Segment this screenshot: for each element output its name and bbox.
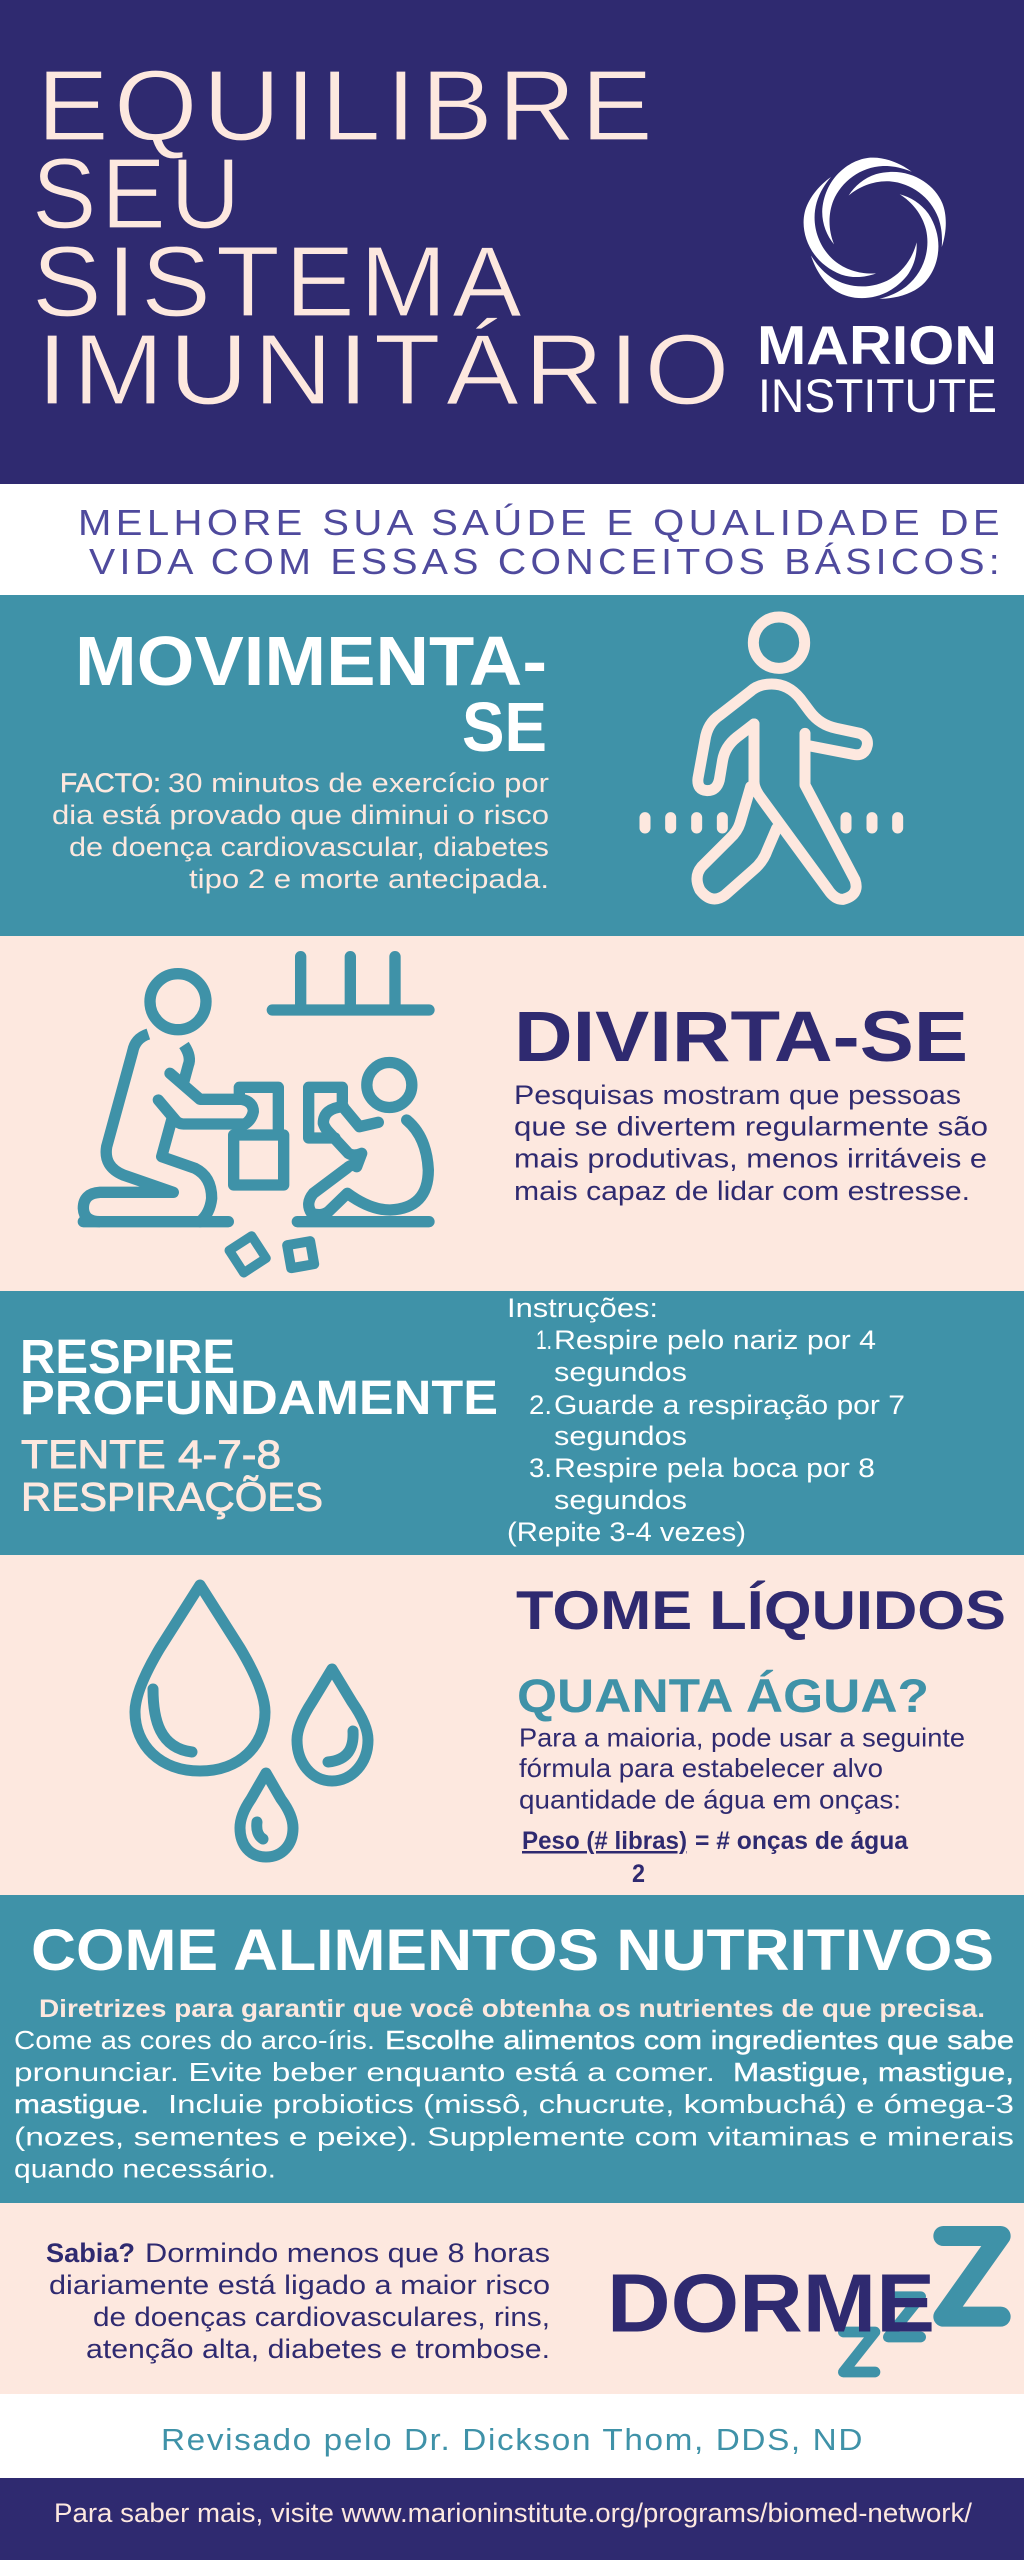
text: sleep fact bbox=[46, 2238, 550, 2364]
panel: divirta-se bbox=[0, 936, 1024, 1291]
text: breathing instructions: (Repite 3-4 vezes) bbox=[507, 1517, 746, 1547]
text: nutrition guidelines: Incluie probiotics (missô, chucrute, kombuchá) e ómega-3 bbox=[168, 2089, 1014, 2119]
text: movimenta-se fact: tipo 2 e morte antecipada. bbox=[189, 864, 549, 894]
text: breathing instructions: Guarde a respiração por 7 bbox=[554, 1390, 905, 1420]
text: sleep fact: Sabia? bbox=[46, 2238, 135, 2268]
title bbox=[32, 50, 735, 426]
text: breathing instructions bbox=[507, 1293, 905, 1547]
text: breathing instructions: segundos bbox=[554, 1357, 687, 1387]
text: breathing instructions: 3. bbox=[529, 1453, 552, 1483]
text: nutrition guidelines bbox=[14, 2025, 1014, 2184]
text: breathing instructions: Respire pelo nariz por 4 bbox=[554, 1325, 876, 1355]
panel: come alimentos nutritivos bbox=[0, 1895, 1024, 2203]
subtitle: MELHORE SUA SAÚDE E QUALIDADE DE bbox=[78, 502, 1004, 543]
text: nutrition guidelines: Mastigue, mastigue, bbox=[733, 2057, 1014, 2087]
text: water formula: 2 bbox=[632, 1860, 645, 1888]
text: breathing instructions: 1. bbox=[536, 1325, 552, 1355]
panel: dorme bbox=[0, 2203, 1024, 2394]
logo wordmark: MARION bbox=[757, 314, 997, 376]
text: nutrition guidelines: mastigue. bbox=[14, 2089, 149, 2119]
heading: tome líquidos: TOME LÍQUIDOS bbox=[516, 1579, 1006, 1641]
footer link text: Para saber mais, visite www.marioninstitute.org/programs/biomed-network/ bbox=[54, 2498, 973, 2528]
heading: come alimentos nutritivos: COME ALIMENTOS NUTRITIVOS bbox=[31, 1918, 994, 1983]
text: divirta-se research: que se divertem regularmente são bbox=[514, 1112, 988, 1142]
text: water formula: Peso (# libras) bbox=[522, 1827, 687, 1855]
text: nutrition guidelines: (nozes, sementes e peixe). Supplemente com vitaminas e minerais bbox=[14, 2122, 1014, 2152]
heading: respire profundamente: PROFUNDAMENTE bbox=[20, 1372, 498, 1425]
logo wordmark bbox=[757, 314, 997, 422]
heading: movimenta-se: SE bbox=[462, 688, 547, 766]
text: nutrition guidelines lead: Diretrizes para garantir que você obtenha os nutrientes de que precisa. bbox=[39, 1995, 985, 2023]
text: water formula: = # onças de água bbox=[695, 1827, 909, 1855]
title: IMUNITÁRIO bbox=[37, 314, 735, 426]
icon: Marion Institute swirl logo bbox=[790, 157, 960, 320]
subheading: 4-7-8 breaths: RESPIRAÇÕES bbox=[21, 1474, 323, 1520]
heading: movimenta-se bbox=[75, 622, 547, 766]
text: breathing instructions: 2. bbox=[529, 1390, 552, 1420]
text: movimenta-se fact: FACTO: bbox=[60, 768, 161, 798]
text: movimenta-se fact: dia está provado que diminui o risco bbox=[52, 800, 549, 830]
subheading: quanta água: QUANTA ÁGUA? bbox=[517, 1669, 929, 1722]
text: water formula intro: quantidade de água em onças: bbox=[519, 1784, 901, 1814]
text: water formula intro bbox=[519, 1722, 965, 1814]
text: nutrition guidelines: Come as cores do arco-íris. bbox=[14, 2025, 375, 2055]
subtitle: VIDA COM ESSAS CONCEITOS BÁSICOS: bbox=[89, 541, 1004, 582]
text: divirta-se research: mais capaz de lidar com estresse. bbox=[514, 1176, 970, 1206]
panel: header background bbox=[0, 0, 1024, 484]
text: breathing instructions: Instruções: bbox=[507, 1293, 658, 1323]
heading: movimenta-se: MOVIMENTA- bbox=[75, 622, 547, 700]
title: EQUILIBRE bbox=[37, 50, 658, 162]
panel: respire profundamente bbox=[0, 1291, 1024, 1555]
heading: respire profundamente: RESPIRE bbox=[20, 1331, 235, 1384]
heading: divirta-se: DIVIRTA-SE bbox=[514, 998, 968, 1077]
text: divirta-se research: mais produtivas, menos irritáveis e bbox=[514, 1144, 987, 1174]
text: water formula intro: Para a maioria, pode usar a seguinte bbox=[519, 1722, 965, 1752]
subheading: 4-7-8 breaths bbox=[21, 1433, 323, 1520]
subtitle bbox=[78, 502, 1004, 582]
text: breathing instructions: segundos bbox=[554, 1485, 687, 1515]
text: water formula bbox=[522, 1827, 909, 1888]
text: water formula intro: fórmula para estabelecer alvo bbox=[519, 1753, 883, 1783]
panel: footer bbox=[0, 2478, 1024, 2560]
text: movimenta-se fact: de doença cardiovascular, diabetes bbox=[69, 832, 549, 862]
heading: respire profundamente bbox=[20, 1331, 498, 1425]
text: breathing instructions: Respire pela boca por 8 bbox=[554, 1453, 875, 1483]
text: sleep fact: Dormindo menos que 8 horas bbox=[145, 2238, 550, 2268]
text: movimenta-se fact bbox=[52, 768, 549, 894]
title: SISTEMA bbox=[32, 226, 527, 338]
text: sleep fact: atenção alta, diabetes e trombose. bbox=[86, 2334, 550, 2364]
text: divirta-se research: Pesquisas mostram que pessoas bbox=[514, 1080, 961, 1110]
text: breathing instructions: segundos bbox=[554, 1421, 687, 1451]
text: nutrition guidelines: Escolhe alimentos com ingredientes que sabe bbox=[385, 2025, 1014, 2055]
text: nutrition guidelines: pronunciar. Evite beber enquanto está a comer. bbox=[14, 2057, 715, 2087]
text: movimenta-se fact: 30 minutos de exercício por bbox=[168, 768, 549, 798]
text: sleep fact: diariamente está ligado a maior risco bbox=[49, 2270, 550, 2300]
logo wordmark: INSTITUTE bbox=[758, 369, 997, 422]
heading: dorme: DORME bbox=[607, 2256, 935, 2350]
panel: movimenta-se bbox=[0, 595, 1024, 936]
title: SEU bbox=[32, 138, 245, 250]
icon: adult and child playing with blocks bbox=[83, 957, 429, 1273]
icon: water drops bbox=[135, 1585, 368, 1857]
subheading: 4-7-8 breaths: TENTE 4-7-8 bbox=[21, 1433, 281, 1477]
text: divirta-se research bbox=[514, 1080, 988, 1206]
reviewer credit: Revisado pelo Dr. Dickson Thom, DDS, ND bbox=[161, 2422, 864, 2457]
icon: sleeping z letters bbox=[843, 2236, 1001, 2372]
text: nutrition guidelines: quando necessário. bbox=[14, 2154, 276, 2184]
text: sleep fact: de doenças cardiovasculares, rins, bbox=[93, 2302, 550, 2332]
icon: walking person bbox=[645, 617, 898, 899]
panel: tome líquidos bbox=[0, 1555, 1024, 1895]
